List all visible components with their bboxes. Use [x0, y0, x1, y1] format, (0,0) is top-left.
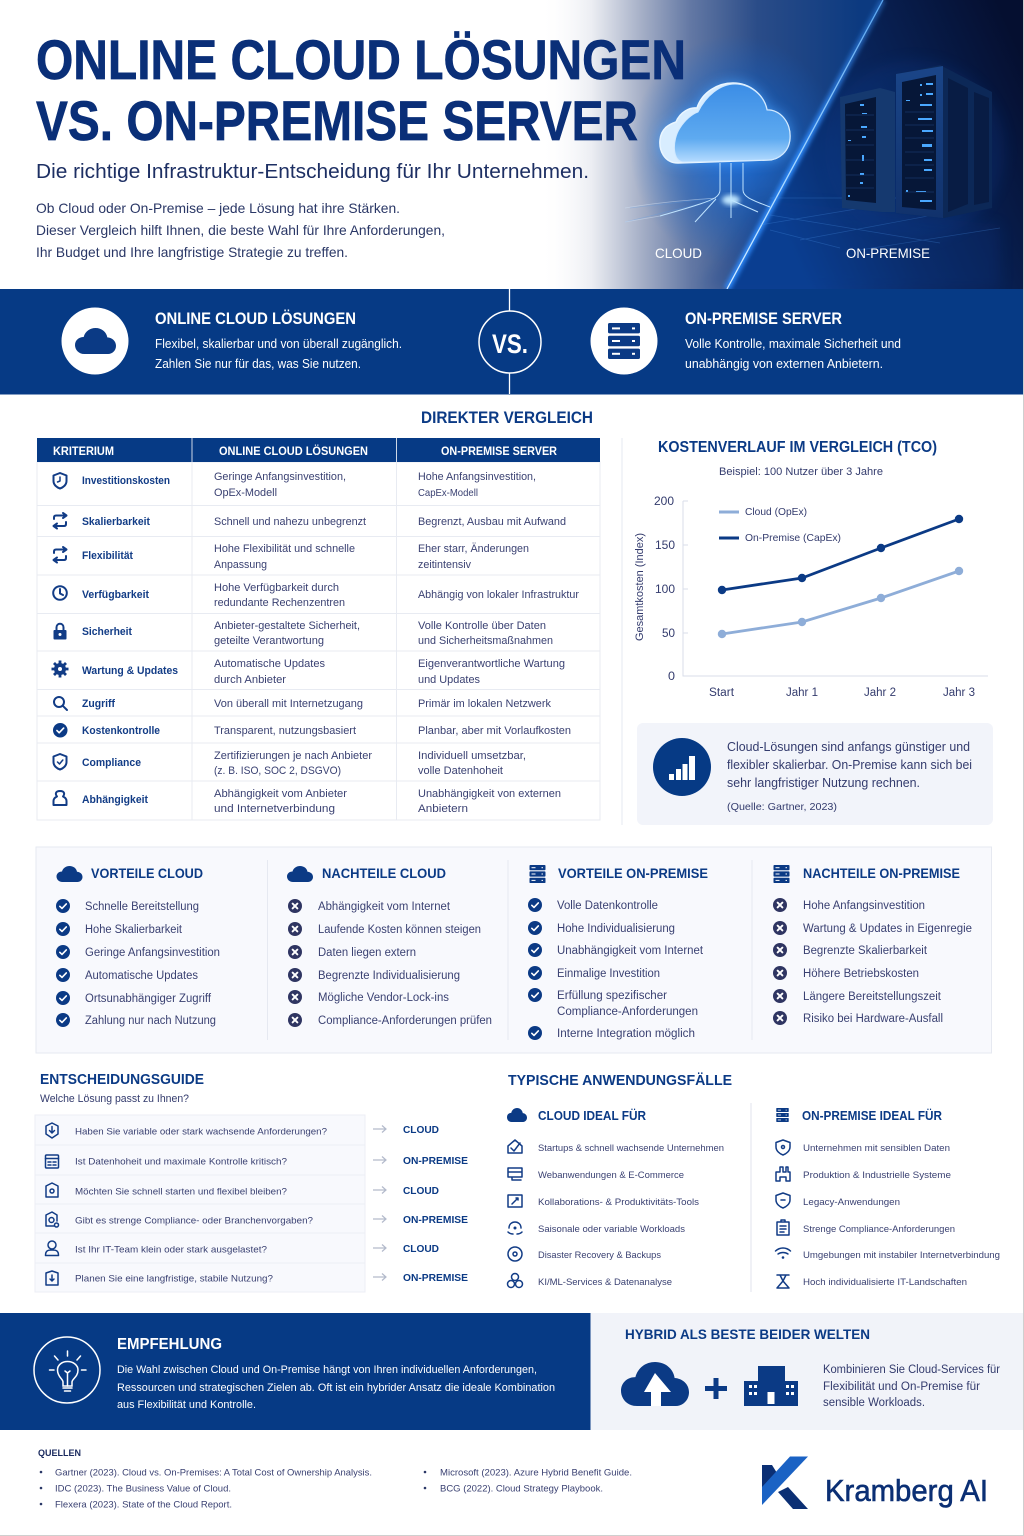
- column: on-premise use cases: Umgebungen mit instabiler Internetverbindung: [803, 1250, 1000, 1261]
- guide row 5: CLOUD: [403, 1243, 439, 1255]
- column: Vorteile Cloud: Zahlung nur nach Nutzung: [85, 1015, 216, 1027]
- column: Vorteile Cloud: Ortsunabhängiger Zugriff: [85, 993, 212, 1005]
- guide row 1: Haben Sie variable oder stark wachsende Anforderungen?: [75, 1126, 327, 1138]
- row: Zugriff: Zugriff: [82, 698, 115, 710]
- hero labels: [655, 245, 930, 261]
- callout: cost insight: Cloud-Lösungen sind anfangs günstiger und: [727, 740, 970, 754]
- column: Vorteile On-Premise: [528, 865, 708, 1040]
- row: Compliance: volle Datenhoheit: [418, 765, 503, 777]
- guide row 1: CLOUD: [403, 1124, 439, 1136]
- row: Wartung und Updates: Wartung & Updates: [82, 665, 178, 677]
- row: Wartung und Updates: Eigenverantwortliche Wartung: [418, 658, 565, 670]
- column: Nachteile Cloud: Abhängigkeit vom Internet: [318, 901, 451, 913]
- y axis labels: 150: [655, 538, 675, 552]
- guide row 5: [46, 1241, 439, 1256]
- row: Verfügbarkeit: Abhängig von lokaler Infrastruktur: [418, 589, 579, 601]
- callout: cost insight: flexibler skalierbar. On-Premise kann sich bei: [727, 758, 972, 772]
- sources: Gartner (2023). Cloud vs. On-Premises: A Total Cost of Ownership Analysis.: [55, 1468, 372, 1478]
- guide row 4: Gibt es strenge Compliance- oder Branchenvorgaben?: [75, 1216, 313, 1226]
- row: Flexibilität: Anpassung: [214, 559, 267, 571]
- icon: upload cloud: [621, 1362, 689, 1406]
- heading: TCO chart: [658, 439, 937, 478]
- sources: Microsoft (2023). Azure Hybrid Benefit Guide.: [440, 1468, 632, 1478]
- subtitle: Die richtige Infrastruktur-Entscheidung für Ihr Unternehmen.: [36, 160, 589, 183]
- column: Vorteile Cloud: Automatische Updates: [85, 970, 198, 982]
- intro text: Ob Cloud oder On-Premise – jede Lösung hat ihre Stärken.: [36, 200, 400, 216]
- row: Flexibilität: [54, 543, 529, 571]
- row: Investitionskosten: CapEx-Modell: [418, 487, 478, 499]
- row: Kostenkontrolle: Kostenkontrolle: [82, 725, 160, 737]
- row: Sicherheit: Volle Kontrolle über Daten: [418, 620, 546, 632]
- column: cloud use cases: KI/ML-Services & Datenanalyse: [538, 1277, 672, 1288]
- callout: cost insight: [637, 723, 993, 825]
- row: Investitionskosten: [54, 471, 536, 499]
- panel: recommendation: Die Wahl zwischen Cloud und On-Premise hängt von Ihren individuellen Anforderungen,: [117, 1364, 537, 1376]
- title: ONLINE CLOUD LÖSUNGEN: [36, 28, 686, 91]
- column: Vorteile Cloud: Schnelle Bereitstellung: [85, 901, 199, 913]
- icon: glowing cloud: [625, 83, 790, 222]
- column: cloud use cases: Disaster Recovery & Backups: [538, 1250, 661, 1261]
- column: on-premise use cases: Hoch individualisierte IT-Landschaften: [803, 1277, 967, 1288]
- on-premise summary: unabhängig von externen Anbietern.: [685, 356, 883, 371]
- on-premise summary: Volle Kontrolle, maximale Sicherheit und: [685, 336, 901, 351]
- row: Zugriff: [54, 697, 551, 710]
- sources: BCG (2022). Cloud Strategy Playbook.: [440, 1484, 603, 1494]
- panel: decision guide: [35, 1115, 468, 1292]
- comparison table: [37, 438, 600, 820]
- column: on-premise use cases: Legacy-Anwendungen: [803, 1197, 900, 1208]
- legend: Cloud (OpEx): [745, 506, 807, 518]
- panel: hybrid: Kombinieren Sie Cloud-Services für: [823, 1364, 1000, 1376]
- icon: server badge: [590, 308, 658, 374]
- sources: QUELLEN: [38, 1448, 81, 1459]
- column: Nachteile On-Premise: Hohe Anfangsinvestition: [803, 900, 925, 912]
- heading: direct comparison: DIREKTER VERGLEICH: [421, 408, 593, 427]
- y axis labels: 50: [662, 626, 675, 640]
- guide row 6: ON-PREMISE: [403, 1272, 468, 1284]
- column: Vorteile Cloud: VORTEILE CLOUD: [91, 865, 203, 881]
- row: Investitionskosten: Geringe Anfangsinvestition,: [214, 471, 346, 483]
- series: cloud: [718, 567, 963, 638]
- panel: hybrid: sensible Workloads.: [823, 1397, 925, 1409]
- panel: hybrid: Flexibilität und On-Premise für: [823, 1381, 980, 1393]
- panel: recommendation: EMPFEHLUNG: [117, 1336, 222, 1353]
- row: Sicherheit: geteilte Verantwortung: [214, 635, 324, 647]
- VS badge: VS.: [492, 329, 528, 359]
- row: Sicherheit: und Sicherheitsmaßnahmen: [418, 635, 553, 647]
- row: Kostenkontrolle: [53, 723, 571, 738]
- row: Investitionskosten: Hohe Anfangsinvestition,: [418, 471, 536, 483]
- heading: use cases: TYPISCHE ANWENDUNGSFÄLLE: [508, 1072, 732, 1089]
- column: on-premise use cases: Unternehmen mit sensiblen Daten: [803, 1143, 950, 1154]
- row: Sicherheit: Anbieter-gestaltete Sicherheit,: [214, 620, 360, 632]
- column: Vorteile On-Premise: VORTEILE ON-PREMISE: [558, 865, 708, 881]
- guide row 6: Planen Sie eine langfristige, stabile Nutzung?: [75, 1274, 273, 1284]
- row: Kostenkontrolle: Planbar, aber mit Vorlaufkosten: [418, 725, 571, 737]
- column: Vorteile On-Premise: Erfüllung spezifischer: [557, 990, 667, 1002]
- column: Nachteile On-Premise: Höhere Betriebskosten: [803, 968, 919, 980]
- panel: recommendation: [0, 1313, 590, 1430]
- hero labels: ON-PREMISE: [846, 245, 930, 261]
- guide row 2: Ist Datenhoheit und maximale Kontrolle kritisch?: [75, 1156, 287, 1168]
- sources: IDC (2023). The Business Value of Cloud.: [55, 1484, 231, 1494]
- row: Wartung und Updates: [52, 658, 565, 686]
- table header: ONLINE CLOUD LÖSUNGEN: [219, 445, 368, 458]
- cloud summary: Flexibel, skalierbar und von überall zugänglich.: [155, 336, 402, 351]
- row: Verfügbarkeit: Verfügbarkeit: [82, 589, 149, 601]
- column: cloud use cases: [507, 1108, 724, 1288]
- row: Abhängigkeit: Abhängigkeit vom Anbieter: [214, 788, 347, 800]
- row: Flexibilität: Eher starr, Änderungen: [418, 543, 529, 555]
- sources: [38, 1448, 632, 1510]
- panel: pros and cons: [36, 847, 992, 1053]
- guide row 2: ON-PREMISE: [403, 1155, 468, 1167]
- x axis labels: Start: [709, 687, 735, 699]
- row: Wartung und Updates: durch Anbieter: [214, 674, 286, 686]
- floor lines: [625, 198, 1000, 250]
- x axis labels: [709, 687, 975, 699]
- guide row 1: [46, 1123, 439, 1138]
- column: Nachteile Cloud: NACHTEILE CLOUD: [322, 865, 446, 881]
- icon: building: [744, 1366, 798, 1406]
- row: Compliance: (z. B. ISO, SOC 2, DSGVO): [214, 765, 341, 777]
- row: Verfügbarkeit: redundante Rechenzentren: [214, 597, 345, 609]
- panel: hybrid: HYBRID ALS BESTE BEIDER WELTEN: [625, 1326, 870, 1342]
- y axis title: Gesamtkosten (Index): [634, 533, 646, 641]
- column: Vorteile Cloud: Geringe Anfangsinvestition: [85, 947, 220, 959]
- series: on-premise: [718, 515, 963, 594]
- cloud summary: Zahlen Sie nur für das, was Sie nutzen.: [155, 356, 361, 371]
- row: Abhängigkeit: Anbietern: [418, 803, 468, 815]
- column: Nachteile Cloud: Mögliche Vendor-Lock-ins: [318, 992, 449, 1004]
- table header: KRITERIUM: [53, 446, 114, 458]
- hero artwork: [540, 0, 1024, 289]
- legend: [719, 506, 841, 544]
- column: Nachteile Cloud: Daten liegen extern: [318, 947, 416, 959]
- column: Nachteile On-Premise: Begrenzte Skalierbarkeit: [803, 945, 928, 957]
- guide row 4: [46, 1212, 468, 1227]
- row: Abhängigkeit: [54, 788, 561, 815]
- on-premise summary: ON-PREMISE SERVER: [685, 309, 842, 328]
- row: Skalierbarkeit: Skalierbarkeit: [82, 516, 150, 528]
- row: Flexibilität: Hohe Flexibilität und schnelle: [214, 543, 355, 555]
- column: Nachteile Cloud: Laufende Kosten können steigen: [318, 924, 481, 936]
- guide row 5: Ist Ihr IT-Team klein oder stark ausgelastet?: [75, 1244, 267, 1256]
- icon: cloud badge: [62, 308, 128, 374]
- logo: Kramberg AI: Kramberg AI: [825, 1473, 988, 1508]
- y axis labels: 100: [655, 582, 675, 596]
- cloud summary: ONLINE CLOUD LÖSUNGEN: [155, 309, 356, 328]
- row: Verfügbarkeit: [53, 582, 579, 609]
- heading: TCO chart: Beispiel: 100 Nutzer über 3 Jahre: [719, 466, 883, 478]
- row: Abhängigkeit: Unabhängigkeit von externen: [418, 788, 561, 800]
- row: Compliance: [54, 750, 526, 777]
- legend: On-Premise (CapEx): [745, 532, 841, 544]
- y axis labels: [654, 494, 675, 683]
- guide row 6: [46, 1271, 468, 1285]
- guide row 3: [46, 1183, 439, 1198]
- column: cloud use cases: Kollaborations- & Produktivitäts-Tools: [538, 1197, 699, 1208]
- column: cloud use cases: CLOUD IDEAL FÜR: [538, 1108, 646, 1123]
- x axis labels: Jahr 2: [864, 687, 896, 699]
- cloud summary: [155, 309, 402, 371]
- heading: decision guide: [40, 1072, 204, 1105]
- column: on-premise use cases: [776, 1108, 1000, 1288]
- x axis labels: Jahr 1: [786, 687, 818, 699]
- heading: decision guide: ENTSCHEIDUNGSGUIDE: [40, 1072, 204, 1088]
- column: cloud use cases: Saisonale oder variable Workloads: [538, 1224, 685, 1235]
- row: Wartung und Updates: und Updates: [418, 674, 480, 686]
- row: Skalierbarkeit: Schnell und nahezu unbegrenzt: [214, 516, 366, 528]
- icon: light bulb: [34, 1337, 100, 1403]
- column: Vorteile On-Premise: Hohe Individualisierung: [557, 923, 675, 935]
- row: Abhängigkeit: und Internetverbindung: [214, 803, 335, 815]
- row: Sicherheit: [54, 620, 553, 647]
- icon: plus: [705, 1378, 727, 1399]
- row: Investitionskosten: OpEx-Modell: [214, 487, 277, 499]
- column: on-premise use cases: ON-PREMISE IDEAL FÜR: [802, 1108, 942, 1123]
- logo: Kramberg AI: [762, 1456, 988, 1509]
- y axis labels: 200: [654, 494, 674, 508]
- title: VS. ON-PREMISE SERVER: [36, 89, 638, 152]
- table header: ON-PREMISE SERVER: [441, 446, 558, 458]
- intro text: Dieser Vergleich hilft Ihnen, die beste Wahl für Ihre Anforderungen,: [36, 222, 445, 238]
- x axis labels: Jahr 3: [943, 687, 975, 699]
- column: Nachteile On-Premise: Wartung & Updates in Eigenregie: [803, 923, 972, 935]
- column: Vorteile On-Premise: Einmalige Investition: [557, 968, 660, 980]
- column: Nachteile On-Premise: Risiko bei Hardware-Ausfall: [803, 1013, 943, 1025]
- heading: TCO chart: KOSTENVERLAUF IM VERGLEICH (TCO): [658, 439, 937, 456]
- on-premise summary: [685, 309, 901, 371]
- panel: recommendation: Ressourcen und strategischen Zielen ab. Oft ist ein hybrider Ansatz die ideale Kombination: [117, 1382, 555, 1394]
- guide row 2: [46, 1155, 468, 1168]
- row: Verfügbarkeit: Hohe Verfügbarkeit durch: [214, 582, 339, 594]
- row: Flexibilität: Flexibilität: [82, 550, 133, 562]
- icon: bar chart badge: [653, 738, 711, 796]
- column: on-premise use cases: Produktion & Industrielle Systeme: [803, 1170, 951, 1181]
- column: Nachteile On-Premise: [773, 865, 972, 1025]
- column: Vorteile On-Premise: Interne Integration möglich: [557, 1028, 695, 1040]
- row: Skalierbarkeit: Begrenzt, Ausbau mit Aufwand: [418, 516, 566, 528]
- row: Kostenkontrolle: Transparent, nutzungsbasiert: [214, 725, 356, 737]
- row: Compliance: Zertifizierungen je nach Anbieter: [214, 750, 372, 762]
- row: Abhängigkeit: Abhängigkeit: [82, 794, 148, 806]
- column: cloud use cases: Startups & schnell wachsende Unternehmen: [538, 1143, 724, 1154]
- icon: server racks: [840, 65, 992, 218]
- hero labels: CLOUD: [655, 245, 702, 261]
- row: Zugriff: Von überall mit Internetzugang: [214, 698, 363, 710]
- column: Vorteile Cloud: Hohe Skalierbarkeit: [85, 924, 183, 936]
- guide row 4: ON-PREMISE: [403, 1214, 468, 1226]
- row: Wartung und Updates: Automatische Updates: [214, 658, 326, 670]
- line chart: cost over time: [634, 494, 988, 699]
- heading: decision guide: Welche Lösung passt zu Ihnen?: [40, 1093, 189, 1105]
- callout: cost insight: sehr langfristiger Nutzung rechnen.: [727, 776, 920, 790]
- panel: comparison banner: [0, 289, 1024, 394]
- column: Vorteile On-Premise: Compliance-Anforderungen: [557, 1006, 698, 1018]
- sources: Flexera (2023). State of the Cloud Report.: [55, 1500, 232, 1510]
- column: on-premise use cases: Strenge Compliance-Anforderungen: [803, 1224, 955, 1235]
- title: [36, 28, 686, 152]
- row: Compliance: Compliance: [82, 757, 141, 769]
- panel: hybrid: [590, 1313, 1024, 1430]
- intro text: Ihr Budget und Ihre langfristige Strategie zu treffen.: [36, 244, 348, 260]
- intro text: [36, 200, 445, 260]
- column: Vorteile On-Premise: Volle Datenkontrolle: [557, 900, 658, 912]
- table header: [37, 438, 600, 462]
- column: Nachteile Cloud: [287, 865, 492, 1027]
- column: Vorteile Cloud: [56, 865, 220, 1027]
- row: Skalierbarkeit: [54, 513, 566, 528]
- guide row 3: CLOUD: [403, 1185, 439, 1197]
- row: Zugriff: Primär im lokalen Netzwerk: [418, 698, 551, 710]
- y axis labels: 0: [668, 669, 675, 683]
- row: Compliance: Individuell umsetzbar,: [418, 750, 526, 762]
- panel: recommendation: aus Flexibilität und Kontrolle.: [117, 1399, 256, 1411]
- column: Nachteile On-Premise: Längere Bereitstellungszeit: [803, 991, 942, 1003]
- row: Flexibilität: zeitintensiv: [418, 559, 471, 571]
- VS badge: [479, 311, 541, 373]
- column: cloud use cases: Webanwendungen & E-Commerce: [538, 1170, 684, 1181]
- callout: cost insight: (Quelle: Gartner, 2023): [727, 801, 837, 813]
- row: Sicherheit: Sicherheit: [82, 626, 132, 638]
- column: Nachteile Cloud: Compliance-Anforderungen prüfen: [318, 1015, 492, 1027]
- column: Nachteile On-Premise: NACHTEILE ON-PREMISE: [803, 865, 960, 881]
- row: Investitionskosten: Investitionskosten: [82, 475, 170, 487]
- column: Vorteile On-Premise: Unabhängigkeit vom Internet: [557, 945, 704, 957]
- column: Nachteile Cloud: Begrenzte Individualisierung: [318, 970, 460, 982]
- guide row 3: Möchten Sie schnell starten und flexibel bleiben?: [75, 1186, 287, 1198]
